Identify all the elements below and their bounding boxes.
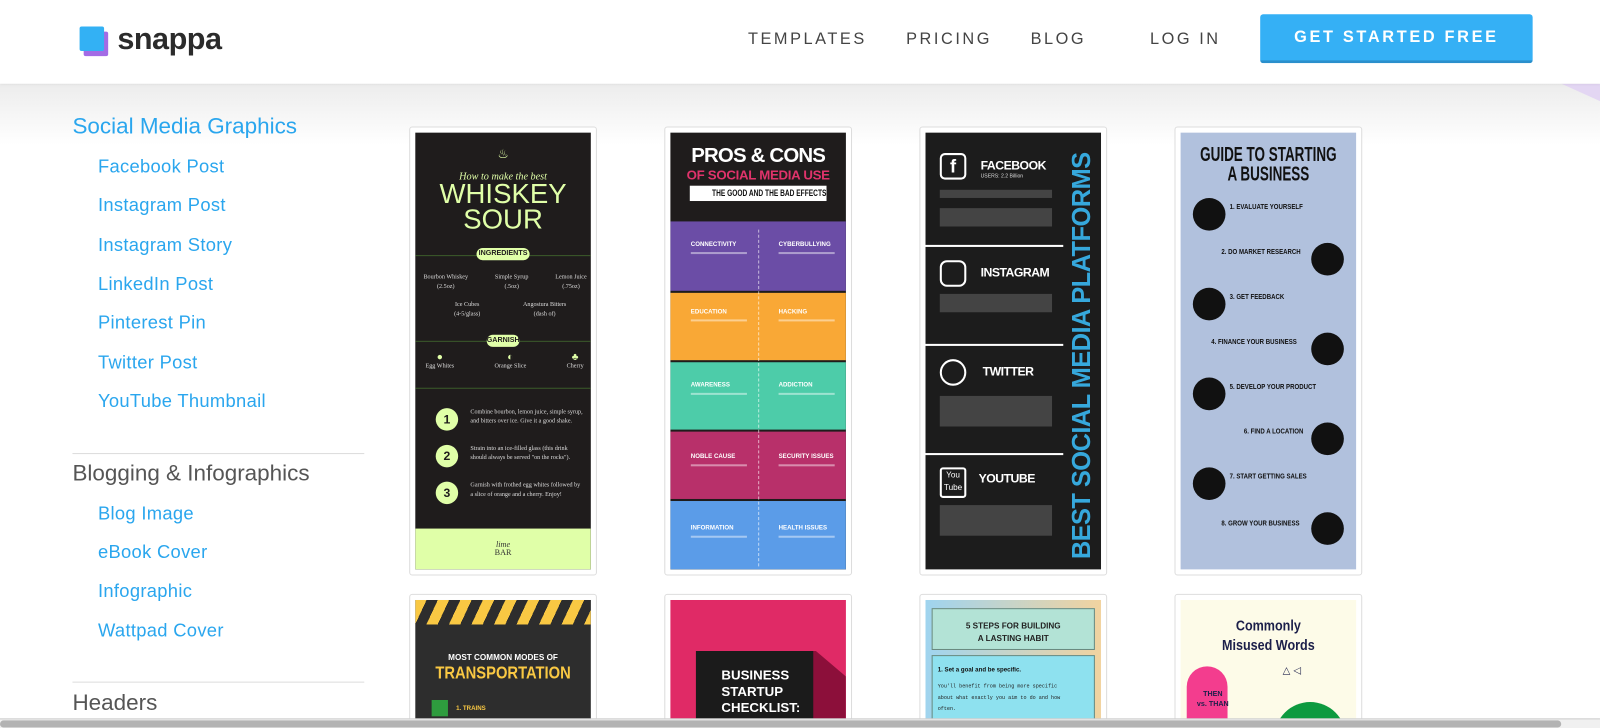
card: guide to starting a business: 3. GET FEEDBACK bbox=[1230, 294, 1284, 301]
card: best social media platforms bbox=[919, 127, 1107, 576]
card: pros & cons: HEALTH ISSUES bbox=[779, 526, 827, 532]
card: whiskey sour: Cherry bbox=[567, 363, 584, 369]
background gradient under header bbox=[0, 84, 1600, 145]
card: whiskey sour: ♨ bbox=[498, 147, 509, 161]
card: guide to starting a business: 4. FINANCE YOUR BUSINESS bbox=[1211, 339, 1297, 346]
card: whiskey sour: BAR bbox=[495, 548, 511, 557]
card: pros & cons: AWARENESS bbox=[691, 383, 730, 389]
card: best social media platforms: FACEBOOK bbox=[981, 158, 1046, 172]
card: whiskey sour: Simple Syrup bbox=[495, 274, 528, 281]
card: pros & cons: PROS & CONS bbox=[691, 145, 825, 167]
card: guide to starting a business: GUIDE TO STARTING bbox=[1200, 144, 1337, 166]
card: whiskey sour: Bourbon Whiskey bbox=[423, 274, 468, 281]
card: commonly misused words: Misused Words bbox=[1222, 637, 1315, 653]
card: pros & cons: CYBERBULLYING bbox=[779, 242, 831, 248]
card: whiskey sour: (4-5/glass) bbox=[454, 311, 480, 317]
card: guide to starting a business: 5. DEVELOP YOUR PRODUCT bbox=[1230, 384, 1316, 391]
CTA button: GET STARTED FREE bbox=[1294, 29, 1499, 46]
card: transportation: MOST COMMON MODES OF bbox=[448, 653, 558, 662]
card: lasting habit: 1. Set a goal and be specific. bbox=[938, 667, 1021, 673]
card: lasting habit: A LASTING HABIT bbox=[978, 634, 1049, 643]
sidebar categories: Pinterest Pin bbox=[98, 312, 206, 333]
card: pros & cons: CONNECTIVITY bbox=[691, 242, 736, 248]
card: lasting habit: 5 STEPS FOR BUILDING bbox=[966, 621, 1061, 631]
card: commonly misused words: Commonly bbox=[1236, 617, 1301, 634]
card: whiskey sour: Lemon Juice bbox=[555, 274, 587, 281]
sidebar categories: Facebook Post bbox=[98, 156, 224, 177]
sidebar categories: LinkedIn Post bbox=[98, 273, 213, 294]
card: pros & cons: THE GOOD AND THE BAD EFFECTS bbox=[712, 188, 826, 198]
card: whiskey sour: (.75oz) bbox=[562, 284, 580, 290]
card: transportation bbox=[409, 594, 597, 728]
steps bbox=[436, 408, 458, 431]
sidebar categories: Instagram Story bbox=[98, 235, 232, 255]
card: whiskey sour: ♣ bbox=[572, 352, 578, 363]
card: whiskey sour: SOUR bbox=[463, 204, 543, 235]
card: pros & cons: HACKING bbox=[779, 309, 807, 315]
card: whiskey sour: (.5oz) bbox=[504, 284, 519, 290]
card: best social media platforms: TWITTER bbox=[983, 364, 1033, 379]
card: whiskey sour: Garnish with frothed egg whites followed by a slice of orange and a cherry. Enjoy! bbox=[470, 483, 580, 498]
steps: 1 bbox=[444, 412, 450, 427]
header bar bbox=[0, 0, 1600, 84]
card: whiskey sour: ● bbox=[437, 352, 443, 363]
card: lasting habit bbox=[919, 594, 1107, 728]
card: whiskey sour: How to make the best bbox=[459, 171, 547, 183]
card: pros & cons: EDUCATION bbox=[691, 309, 727, 315]
card: best social media platforms: f bbox=[950, 156, 956, 177]
card: lasting habit: You'll benefit from being more specific about what exactly you aim to do and how often. bbox=[938, 684, 1060, 712]
header bar: BLOG bbox=[1031, 31, 1086, 48]
card: best social media platforms: USERS: 2.2 Billion bbox=[981, 173, 1023, 180]
card: whiskey sour: 3 bbox=[444, 486, 450, 500]
sidebar categories: Wattpad Cover bbox=[98, 620, 224, 641]
sidebar categories bbox=[72, 113, 364, 715]
card: whiskey sour: WHISKEY bbox=[440, 179, 567, 209]
heading: social media: Social Media Graphics bbox=[72, 113, 297, 139]
sidebar categories: Twitter Post bbox=[98, 352, 198, 372]
card: business startup checklist: STARTUP bbox=[721, 684, 783, 699]
card: best social media platforms: YOUTUBE bbox=[979, 471, 1035, 486]
card: business startup checklist: CHECKLIST: bbox=[721, 700, 800, 715]
decorative purple corner bbox=[1562, 84, 1600, 101]
card: best social media platforms: INSTAGRAM bbox=[981, 265, 1049, 280]
card: guide to starting a business: 2. DO MARKET RESEARCH bbox=[1221, 249, 1301, 256]
card: whiskey sour: 2 bbox=[444, 449, 450, 463]
card: commonly misused words bbox=[1174, 594, 1362, 728]
card: whiskey sour: Strain into an ice-filled glass (this drink should always be served "on the rocks"). bbox=[470, 446, 570, 461]
heading: headers: Headers bbox=[72, 690, 157, 715]
card: commonly misused words: △ ◁ bbox=[1283, 665, 1301, 677]
card: guide to starting a business: A BUSINESS bbox=[1227, 163, 1309, 186]
card: whiskey sour: (dash of) bbox=[534, 311, 556, 317]
card: guide to starting a business: 7. START GETTING SALES bbox=[1230, 473, 1307, 481]
nav links: TEMPLATES bbox=[748, 31, 867, 48]
card: whiskey sour: GARNISH bbox=[487, 337, 520, 344]
card: guide to starting a business: 8. GROW YOUR BUSINESS bbox=[1221, 520, 1300, 528]
card: business startup checklist: BUSINESS bbox=[721, 667, 789, 683]
card: whiskey sour: Combine bourbon, lemon juice, simple syrup, and bitters over ice. Give it a good shake. bbox=[470, 409, 583, 424]
card: pros & cons: OF SOCIAL MEDIA USE bbox=[687, 167, 830, 183]
card: transportation: 1. TRAINS bbox=[456, 706, 486, 712]
logo: snappa bbox=[117, 22, 221, 56]
card: pros & cons: SECURITY ISSUES bbox=[779, 454, 834, 460]
card: whiskey sour: Ice Cubes bbox=[455, 302, 479, 308]
card: whiskey sour: Angostura Bitters bbox=[523, 302, 566, 308]
CTA button bbox=[1260, 14, 1533, 63]
sidebar categories: YouTube Thumbnail bbox=[98, 391, 266, 411]
vertical title: BEST SOCIAL MEDIA PLATFORMS bbox=[1067, 152, 1096, 559]
sidebar categories: eBook Cover bbox=[98, 542, 208, 562]
card: whiskey sour: Orange Slice bbox=[494, 363, 526, 369]
card: pros & cons bbox=[664, 127, 852, 576]
card: whiskey sour: (2.5oz) bbox=[437, 284, 455, 290]
sidebar categories: Blog Image bbox=[98, 503, 194, 523]
header bar: PRICING bbox=[906, 31, 992, 48]
header bar: LOG IN bbox=[1150, 31, 1221, 48]
card: pros & cons: ADDICTION bbox=[779, 383, 813, 389]
sidebar categories: Infographic bbox=[98, 581, 192, 601]
card: whiskey sour: ◐ bbox=[507, 352, 513, 363]
sidebar categories: Instagram Post bbox=[98, 195, 226, 215]
bottom scrollbar bbox=[0, 718, 1600, 728]
card: pros & cons: INFORMATION bbox=[691, 526, 734, 532]
card: best social media platforms: You Tube bbox=[944, 470, 962, 492]
card: business startup checklist bbox=[664, 594, 852, 728]
card: commonly misused words: vs. THAN bbox=[1197, 701, 1229, 708]
card: commonly misused words: THEN bbox=[1203, 691, 1223, 698]
card: whiskey sour: INGREDIENTS bbox=[479, 250, 527, 257]
heading: blogging: Blogging & Infographics bbox=[72, 460, 310, 486]
card: guide to starting a business: 1. EVALUATE YOURSELF bbox=[1230, 204, 1303, 211]
card: pros & cons: NOBLE CAUSE bbox=[691, 454, 735, 460]
card: whiskey sour: lime bbox=[496, 540, 510, 549]
card: whiskey sour: Egg Whites bbox=[426, 363, 454, 369]
card: guide to starting a business: 6. FIND A LOCATION bbox=[1244, 429, 1303, 436]
card: transportation: TRANSPORTATION bbox=[435, 663, 571, 683]
card: guide to starting a business bbox=[1174, 127, 1362, 576]
card: whiskey sour bbox=[409, 127, 597, 576]
